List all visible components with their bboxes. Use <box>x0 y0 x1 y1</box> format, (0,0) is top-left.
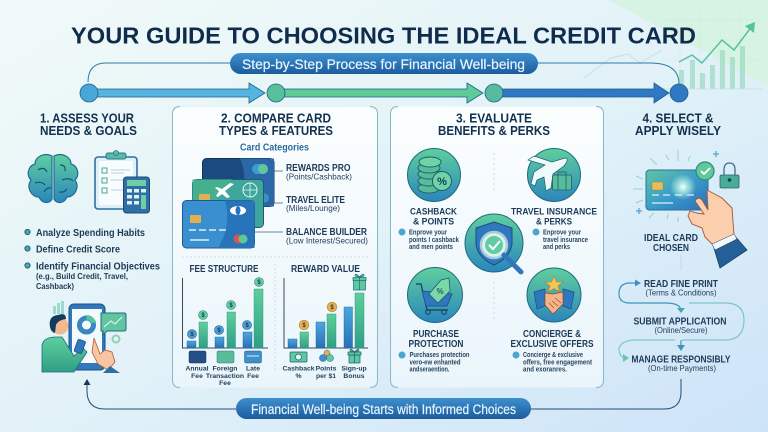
purchase text: vero-ew enhanted <box>410 359 460 366</box>
flow steps <box>632 279 731 373</box>
step 4 heading: 4. SELECT & <box>642 110 714 126</box>
cashback text: points I cashback <box>409 237 459 244</box>
purchase text: PROTECTION <box>408 339 464 350</box>
card stack <box>182 158 274 248</box>
illustration: person with phone <box>42 301 126 373</box>
step 2 heading: 2. COMPARE CARD <box>221 110 331 126</box>
icon: clipboard <box>95 150 137 209</box>
illustration: ideal card in hand <box>633 150 747 268</box>
ideal card label: IDEAL CARD <box>644 233 698 244</box>
cashback text: and men points <box>409 244 453 251</box>
step 1 heading: 1. ASSESS YOUR <box>40 110 135 126</box>
chart: fee structure: Fee <box>219 380 231 387</box>
step 1 heading: NEEDS & GOALS <box>40 123 137 138</box>
travel text: travel insurance <box>543 237 588 244</box>
flow steps: MANAGE RESPONSIBLY <box>632 354 731 365</box>
cashback text <box>398 206 459 251</box>
chart: reward value <box>282 264 368 380</box>
step 2 heading <box>219 110 333 138</box>
travel text: TRAVEL INSURANCE <box>511 206 597 217</box>
chart: fee structure: $ <box>190 332 194 338</box>
concierge text: Concierge & exclusive <box>523 352 583 359</box>
card labels <box>286 163 368 246</box>
ideal card label: CHOSEN <box>653 243 689 254</box>
step 4 heading <box>635 110 721 138</box>
flow arrows <box>619 255 744 358</box>
flow steps: READ FINE PRINT <box>644 279 719 290</box>
top connector lines <box>88 63 679 84</box>
chart: fee structure: FEE STRUCTURE <box>190 264 259 275</box>
panel: evaluate benefits <box>390 106 604 388</box>
chart: fee structure: Fee <box>191 373 203 380</box>
chart: fee structure: Late <box>246 366 260 372</box>
step 2 heading: TYPES & FEATURES <box>219 123 333 138</box>
list: assess needs: Cashback) <box>36 282 74 291</box>
flow steps: (On-time Payments) <box>648 363 716 373</box>
chart: fee structure: $ <box>245 323 249 329</box>
icon: purchase cart <box>408 268 462 322</box>
step 3 heading: BENEFITS & PERKS <box>438 123 550 138</box>
chart: fee structure <box>182 264 268 387</box>
subtitle pill <box>230 53 538 74</box>
card leader lines <box>254 171 283 232</box>
cashback text: Enprove your <box>409 229 447 236</box>
flow steps: SUBMIT APPLICATION <box>634 316 726 327</box>
icon: travel <box>528 148 580 202</box>
flow steps: (Terms & Conditions) <box>646 288 717 298</box>
chart: fee structure: $ <box>229 303 233 309</box>
chart: fee structure: $ <box>217 328 221 334</box>
chart: fee structure: Foreign <box>213 366 237 372</box>
chart: reward value: Cashback <box>282 366 315 372</box>
travel text: and perks <box>543 244 570 251</box>
step 3 heading <box>438 110 550 138</box>
chart: fee structure: Fee <box>247 373 259 380</box>
title: YOUR GUIDE TO CHOOSING THE IDEAL CREDIT CARD <box>71 22 696 48</box>
travel text <box>511 206 597 251</box>
concierge text: and exoranres. <box>523 366 567 374</box>
chart: reward value: % <box>295 373 302 380</box>
cashback text: & POINTS <box>413 216 454 228</box>
step 1 heading <box>40 110 137 138</box>
list: assess needs: Define Credit Score <box>36 244 120 256</box>
icon: shield and magnifier <box>465 214 523 272</box>
icon: brain <box>28 155 78 203</box>
list: assess needs: Analyze Spending Habits <box>36 227 145 239</box>
chart: reward value: $ <box>330 305 334 311</box>
card labels: (Miles/Lounge) <box>286 203 340 213</box>
card labels: BALANCE BUILDER <box>286 227 368 238</box>
card labels: (Low Interest/Secured) <box>286 236 368 246</box>
icon: purchase cart: % <box>436 287 444 296</box>
card labels: (Points/Cashback) <box>286 172 352 182</box>
travel text: Enprove your <box>543 229 581 236</box>
purchase text: andseraention. <box>410 366 450 374</box>
footer pill: Financial Well-being Starts with Informed Choices <box>251 402 516 417</box>
ideal card label <box>644 233 698 254</box>
chart: reward value: Sign-up <box>341 366 367 372</box>
arrow: back to step 1 <box>87 384 236 409</box>
concierge text: EXCLUSIVE OFFERS <box>510 339 594 350</box>
chart: fee structure: Transaction <box>206 373 244 380</box>
subtitle pill: Step-by-Step Process for Financial Well-being <box>242 57 525 72</box>
flow steps: (Online/Secure) <box>654 325 708 335</box>
icon: cashback coins: % <box>437 176 447 188</box>
icon: concierge handshake <box>527 268 581 322</box>
list: assess needs: Identify Financial Objectives <box>36 260 160 272</box>
purchase text <box>398 329 470 374</box>
chart: reward value: REWARD VALUE <box>291 264 360 275</box>
travel text: & PERKS <box>536 216 572 228</box>
card categories heading: Card Categories <box>240 142 309 154</box>
icon: cashback coins <box>408 148 460 202</box>
chart: reward value: per $1 <box>316 373 336 380</box>
chart: fee structure: $ <box>257 280 261 286</box>
card labels: TRAVEL ELITE <box>286 195 345 206</box>
footer pill <box>236 398 531 419</box>
chart: reward value: $ <box>302 323 306 329</box>
list: assess needs <box>25 227 160 291</box>
step 3 heading: 3. EVALUATE <box>456 110 532 126</box>
card labels: REWARDS PRO <box>286 163 351 174</box>
chart: fee structure: Annual <box>185 366 209 372</box>
process arrow <box>80 83 688 103</box>
decorative growth chart top right <box>580 0 768 89</box>
chart: fee structure: $ <box>201 313 205 319</box>
panel: compare card types <box>172 106 378 388</box>
purchase text: Purchases protection <box>410 352 470 359</box>
chart: reward value: Bonus <box>343 373 365 380</box>
purchase text: PURCHASE <box>413 329 459 340</box>
icon: calculator <box>124 177 150 213</box>
list: assess needs: (e.g., Build Credit, Travel, <box>36 272 128 281</box>
cashback text: CASHBACK <box>410 206 457 217</box>
concierge text <box>510 329 594 374</box>
chart: reward value: Points <box>316 366 337 372</box>
concierge text: offers, free engagement <box>523 359 593 366</box>
step 4 heading: APPLY WISELY <box>635 123 721 138</box>
concierge text: CONCIERGE & <box>523 329 581 340</box>
bottom connector line <box>529 379 681 409</box>
